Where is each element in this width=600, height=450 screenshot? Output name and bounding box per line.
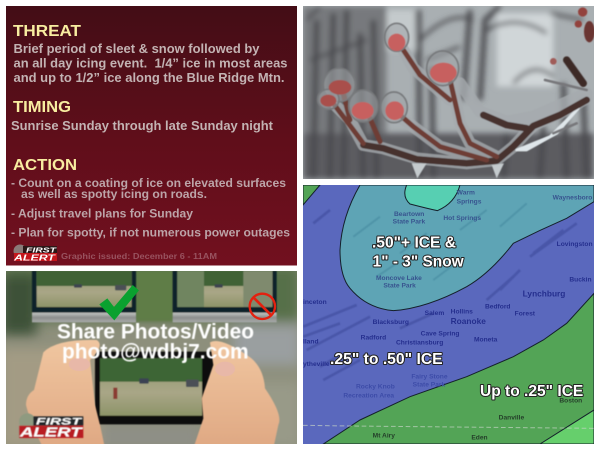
map place labels: Waynesboro	[553, 194, 592, 201]
map place labels: ytheville	[303, 361, 330, 368]
map place labels: Danville	[499, 414, 524, 421]
map place labels: Rocky Knob	[356, 384, 395, 391]
zone: heavier snow	[405, 185, 460, 211]
monitor with accepted photo	[32, 271, 136, 322]
map place labels: Eden	[471, 434, 488, 441]
left hand	[26, 340, 105, 448]
map place labels: Cave Spring	[421, 330, 460, 337]
map place labels: Blacksburg	[373, 319, 409, 326]
heading: action: ACTION	[13, 157, 77, 174]
map place labels: Hot Springs	[443, 215, 481, 222]
icon: red prohibition sign	[250, 294, 275, 319]
zone: bright green corner	[540, 410, 594, 444]
map place labels: Fairy Stone	[411, 374, 448, 381]
text block: share call to action: Share Photos/Video	[57, 320, 254, 343]
panel: threat, timing and action	[6, 6, 297, 266]
map place labels: Moncove Lake	[376, 275, 422, 282]
map place labels: Bedford	[485, 304, 511, 311]
map place labels: Hollins	[451, 308, 473, 315]
panel: ice forecast map	[303, 185, 594, 444]
map place labels: Warm	[457, 189, 475, 196]
ridge texture	[303, 210, 577, 380]
blurred background	[0, 265, 300, 448]
right thumbnail	[215, 362, 235, 376]
monitor with rejected photo	[173, 271, 277, 322]
text block: action list: as well as spotty icing on roads.	[21, 189, 207, 201]
ice-coated branches	[333, 50, 587, 178]
map zone labels: .25" to .50" ICE	[330, 351, 443, 368]
logo: first alert: FIRST	[26, 248, 57, 254]
text block: threat details: an all day icing event. 1/4” ice in most areas	[14, 56, 288, 70]
text block: threat details	[14, 42, 288, 85]
icon: green check mark	[99, 285, 139, 320]
map place labels: Lovingston	[557, 241, 593, 248]
map place labels: State Park	[383, 283, 416, 290]
logo: first alert: FIRST	[36, 417, 83, 427]
map place labels: Salem	[425, 310, 444, 317]
text block: action list: - Plan for spotty, if not numerous power outages	[11, 228, 290, 240]
map place labels: Radford	[361, 334, 386, 341]
right hand	[193, 341, 279, 448]
map place labels: Moneta	[474, 337, 498, 344]
map zone labels: 1" - 3" Snow	[373, 253, 464, 270]
map place labels: Springs	[457, 198, 482, 205]
text block: threat details: Brief period of sleet & snow followed by	[14, 42, 260, 56]
map zone labels: Up to .25" ICE	[480, 383, 583, 400]
map place labels: inceton	[303, 299, 327, 306]
map place labels: Beartown	[394, 211, 424, 218]
green centre patch	[136, 271, 173, 321]
heading: threat: THREAT	[13, 23, 81, 40]
phone with photo	[95, 352, 220, 424]
map place labels: lland	[303, 338, 319, 345]
map place labels: Recreation Area	[343, 392, 394, 399]
zone: up to quarter inch ice	[303, 185, 594, 444]
map place labels: Boston	[559, 398, 582, 405]
map place labels: Forest	[515, 310, 536, 317]
map place labels: Lynchburg	[523, 289, 565, 299]
heading: timing: TIMING	[13, 99, 71, 116]
text block: timing details: Sunrise Sunday through late Sunday night	[11, 119, 274, 133]
text block: action list: - Count on a coating of ice on elevated surfaces	[11, 178, 286, 190]
panel: share photos and video	[0, 265, 300, 448]
panel: ice-coated branch photograph	[303, 6, 595, 179]
blurred winter trees	[303, 6, 594, 179]
snow zone ridge texture	[353, 203, 527, 280]
logo: first alert: ALERT	[13, 252, 56, 262]
map place labels: State Park	[413, 382, 446, 389]
map place labels: Christiansburg	[396, 340, 443, 347]
map place labels: Buckin	[569, 277, 592, 284]
text block: issue date: Graphic issued: December 6 - 11AM	[61, 252, 217, 261]
map zone labels: .50"+ ICE &	[372, 235, 456, 252]
text block: threat details: and up to 1/2” ice along the Blue Ridge Mtn.	[14, 71, 284, 85]
ice-encased buds	[318, 7, 595, 123]
logo: first alert: ALERT	[19, 424, 84, 439]
text block: share call to action	[57, 320, 254, 363]
map zone labels	[330, 235, 583, 400]
map place labels: Mt Airy	[373, 432, 395, 439]
logo: first alert	[19, 413, 84, 439]
map place labels: Roanoke	[451, 316, 486, 326]
text block: action list: - Adjust travel plans for Sunday	[11, 208, 194, 220]
text block: action list	[11, 178, 290, 240]
zone: quarter to half inch ice	[303, 185, 594, 444]
zone: half inch plus ice and snow	[340, 185, 594, 311]
logo: first alert	[13, 244, 57, 262]
state border	[303, 425, 594, 428]
map place labels	[303, 189, 593, 441]
text block: share call to action: photo@wdbj7.com	[62, 340, 249, 363]
map place labels: State Park	[393, 218, 426, 225]
left thumbnail	[69, 358, 90, 371]
